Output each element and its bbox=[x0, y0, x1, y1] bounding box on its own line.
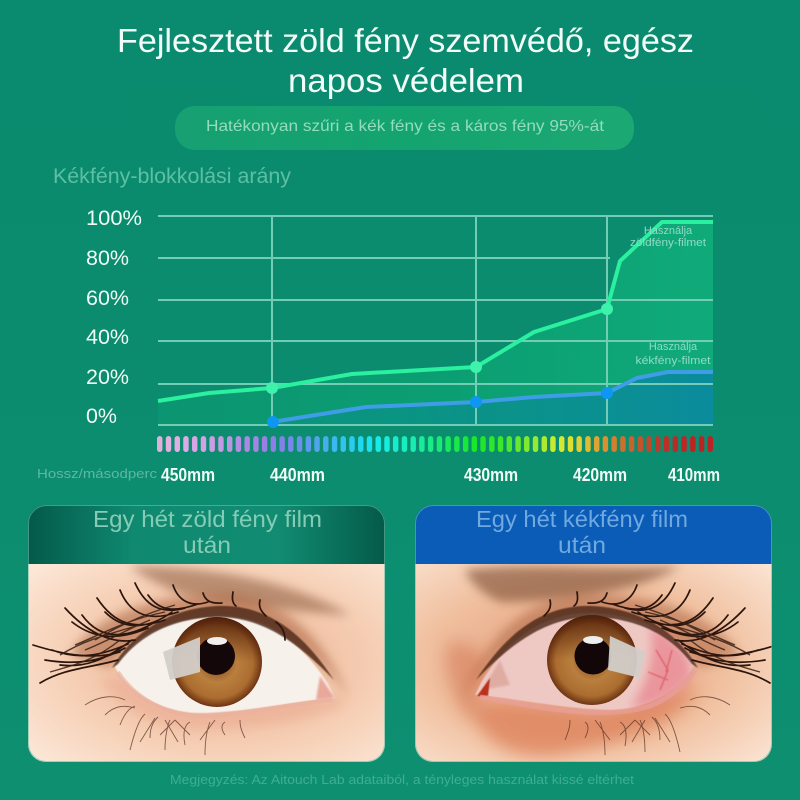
y axis labels: 60% bbox=[86, 287, 129, 310]
blue film label bbox=[636, 341, 710, 367]
x axis labels: 450mm bbox=[161, 465, 215, 485]
y axis labels bbox=[86, 207, 142, 428]
upper lashes bbox=[544, 583, 777, 683]
x axis labels: 440mm bbox=[270, 465, 325, 485]
panel heading: Egy hét kékfény film bbox=[476, 506, 688, 532]
x axis labels bbox=[161, 465, 720, 485]
lower lashes bbox=[565, 697, 730, 755]
photo: irritated eye bbox=[415, 563, 777, 762]
footnote: Megjegyzés: Az Aitouch Lab adataiból, a tényleges használat kissé eltérhet bbox=[170, 773, 635, 787]
blue film label: Használja bbox=[649, 341, 698, 353]
panel border bbox=[416, 506, 772, 762]
iris bbox=[547, 615, 645, 705]
subtitle pill bbox=[175, 106, 634, 150]
blue data points bbox=[267, 387, 613, 428]
panel header bbox=[28, 505, 385, 564]
green film label bbox=[630, 225, 706, 249]
green film area bbox=[158, 222, 713, 425]
y axis labels: 80% bbox=[86, 247, 129, 270]
panel: green film eye bbox=[28, 505, 385, 762]
x axis title: Hossz/másodperc bbox=[37, 466, 158, 481]
iris bbox=[163, 617, 262, 707]
upper lid bbox=[112, 606, 334, 680]
chart title: Kékfény-blokkolási arány bbox=[53, 165, 292, 188]
x axis labels: 420mm bbox=[573, 465, 627, 485]
subtitle pill: Hatékonyan szűri a kék fény és a káros fény 95%-át bbox=[206, 118, 605, 135]
panel heading: után bbox=[183, 532, 231, 558]
lower lid bbox=[480, 670, 695, 713]
y axis labels: 40% bbox=[86, 326, 129, 349]
y axis labels: 100% bbox=[86, 207, 142, 230]
lower lashes bbox=[85, 697, 245, 755]
title bbox=[117, 22, 694, 99]
panel: blue film eye bbox=[415, 505, 777, 762]
photo: healthy eye bbox=[28, 563, 385, 762]
line chart bbox=[158, 216, 713, 428]
y axis labels: 0% bbox=[86, 405, 117, 428]
panel border bbox=[28, 506, 384, 762]
title: Fejlesztett zöld fény szemvédő, egész bbox=[117, 22, 694, 59]
green film label: zöldfény-filmet bbox=[630, 237, 706, 249]
sclera bbox=[115, 616, 335, 713]
panel heading bbox=[93, 506, 322, 558]
panel heading bbox=[476, 506, 688, 558]
x axis labels: 430mm bbox=[464, 465, 518, 485]
title: napos védelem bbox=[288, 62, 524, 99]
panel heading: után bbox=[558, 532, 606, 558]
sclera bbox=[475, 613, 695, 710]
blue film area bbox=[272, 372, 713, 425]
lower lid bbox=[116, 671, 318, 712]
panel header bbox=[415, 505, 772, 564]
green film label: Használja bbox=[644, 225, 693, 237]
upper lashes bbox=[33, 583, 285, 683]
x axis labels: 410mm bbox=[668, 465, 720, 485]
upper lid bbox=[476, 606, 698, 680]
blue film label: kékfény-filmet bbox=[636, 355, 710, 367]
green data points bbox=[266, 303, 613, 394]
wavelength spectrum bar bbox=[157, 436, 713, 452]
panel heading: Egy hét zöld fény film bbox=[93, 506, 322, 532]
blue film line bbox=[272, 372, 713, 422]
y axis labels: 20% bbox=[86, 366, 129, 389]
green film line bbox=[158, 222, 713, 401]
